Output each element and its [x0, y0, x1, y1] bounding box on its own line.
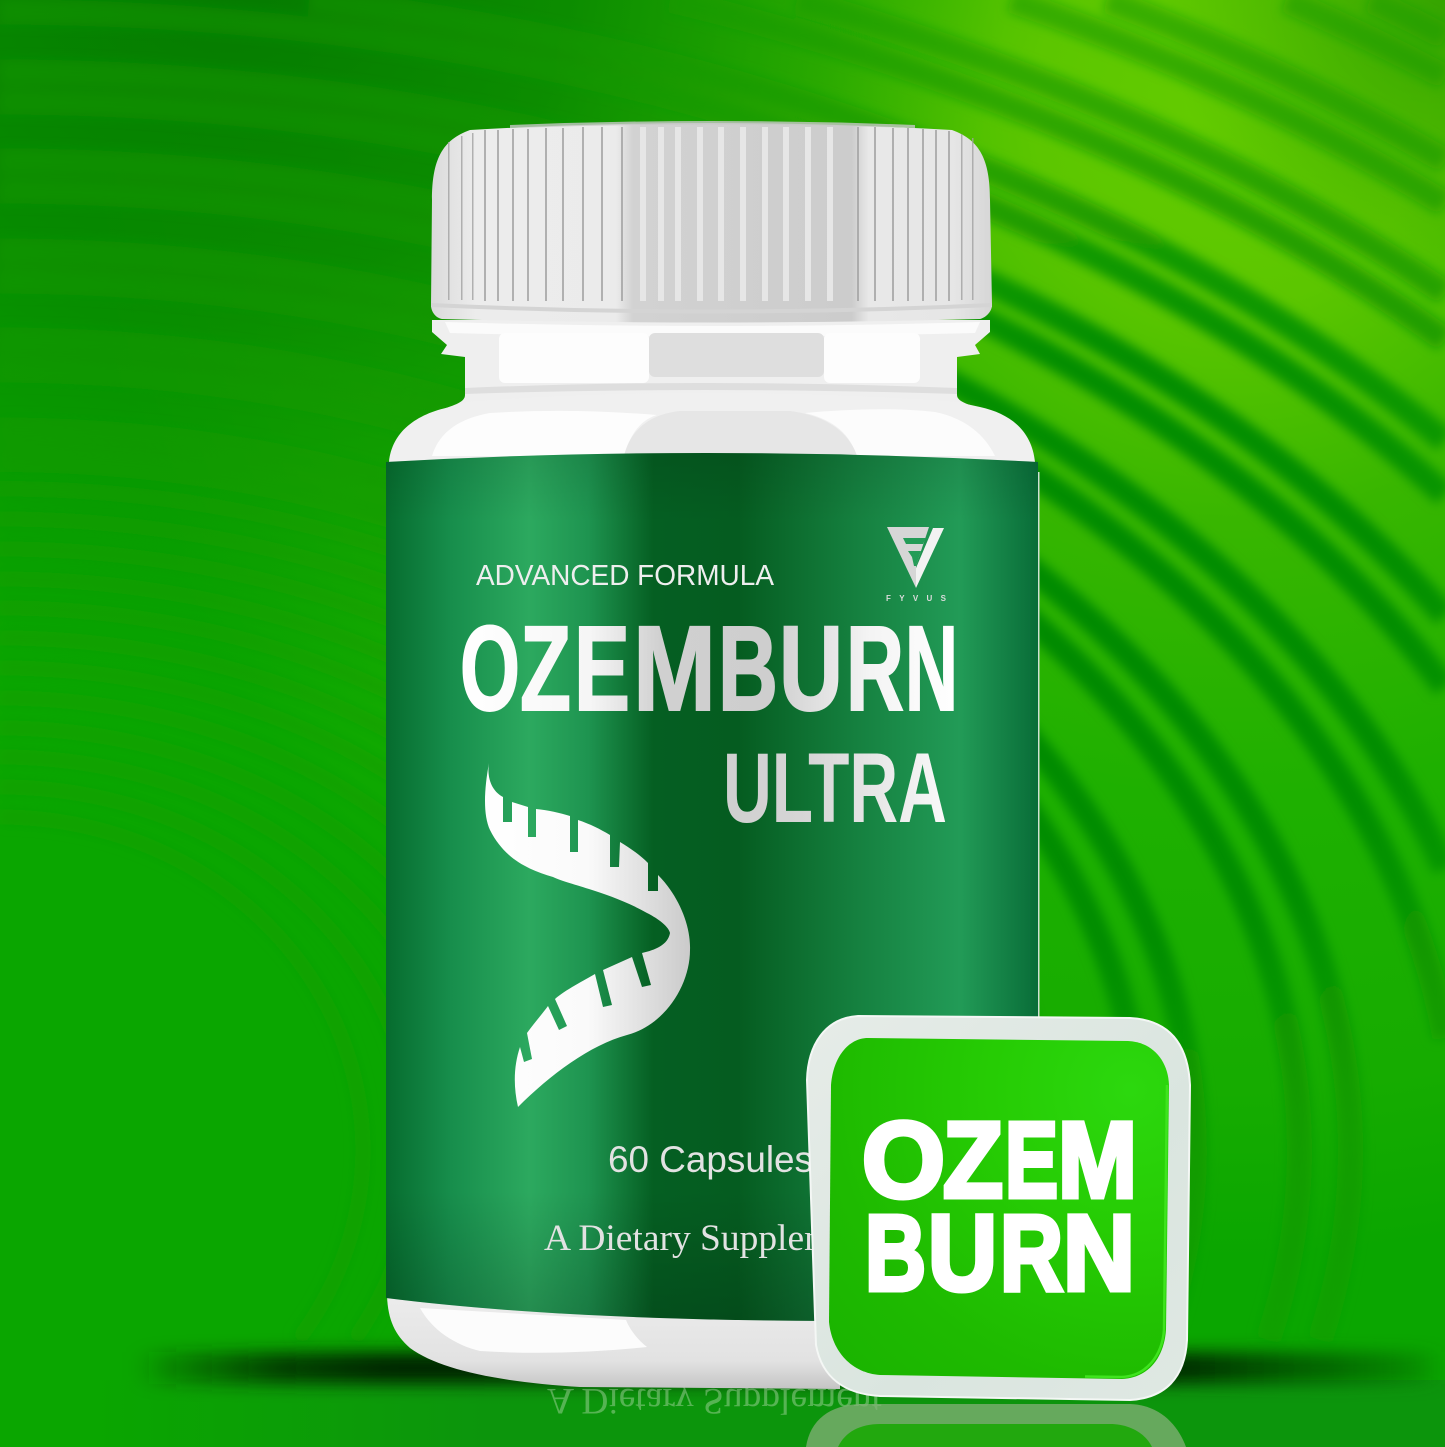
bottle shoulder — [389, 393, 1035, 462]
product name: ultra: ULTRA — [723, 732, 947, 843]
brand logo: Fyvus — [886, 527, 947, 603]
label edge highlight — [1038, 472, 1040, 1018]
badge: Ozem Burn app tile — [807, 1016, 1190, 1400]
product name: U — [779, 600, 843, 736]
product name: Z — [520, 600, 571, 736]
badge glossy edge — [1085, 1085, 1167, 1377]
badge wordmark: burn: N — [1063, 1192, 1135, 1313]
badge wordmark: burn — [865, 1192, 1135, 1313]
floor contact shadow — [150, 1352, 1430, 1384]
badge wordmark: ozem: O — [862, 1099, 945, 1220]
badge wordmark: burn: B — [865, 1192, 926, 1313]
base highlight — [420, 1308, 647, 1353]
badge wordmark: ozem: E — [1005, 1099, 1058, 1220]
cap ribs: dark grooves — [448, 127, 974, 301]
floor tint below the horizon — [90, 1380, 1445, 1447]
badge wordmark: ozem — [862, 1099, 1137, 1220]
product name: E — [574, 600, 630, 736]
dietary supplement line: A Dietary Supplement — [544, 1218, 880, 1259]
product name: M — [633, 600, 716, 736]
reflected badge — [806, 1404, 1186, 1447]
product name: N — [905, 600, 958, 736]
capsule count: 60 Capsules — [608, 1139, 813, 1180]
badge wordmark: burn: R — [1000, 1192, 1063, 1313]
product name: O — [460, 600, 520, 736]
cap ribs: centre highlights — [640, 127, 833, 301]
product name: R — [846, 600, 904, 736]
screw cap — [431, 121, 992, 322]
brand logo: Fyvus: FYVUS — [886, 594, 947, 603]
label text: advanced formula: ADVANCED FORMULA — [476, 560, 774, 592]
reflected supplement text: A Dietary Supplement — [547, 1380, 883, 1421]
badge green face — [829, 1038, 1169, 1379]
product bottle — [386, 121, 1040, 1389]
badge wordmark: ozem: Z — [943, 1099, 1003, 1220]
bottle neck — [432, 320, 990, 410]
bottle base — [387, 1296, 840, 1389]
product name: B — [718, 600, 778, 736]
badge wordmark: burn: U — [928, 1192, 997, 1313]
badge outer frame — [807, 1016, 1190, 1400]
badge wordmark: ozem: M — [1058, 1099, 1137, 1220]
reflection of bottle and badge — [547, 1380, 1186, 1447]
measuring tape icon — [485, 763, 690, 1107]
label — [386, 453, 1038, 1321]
product name — [460, 600, 958, 736]
